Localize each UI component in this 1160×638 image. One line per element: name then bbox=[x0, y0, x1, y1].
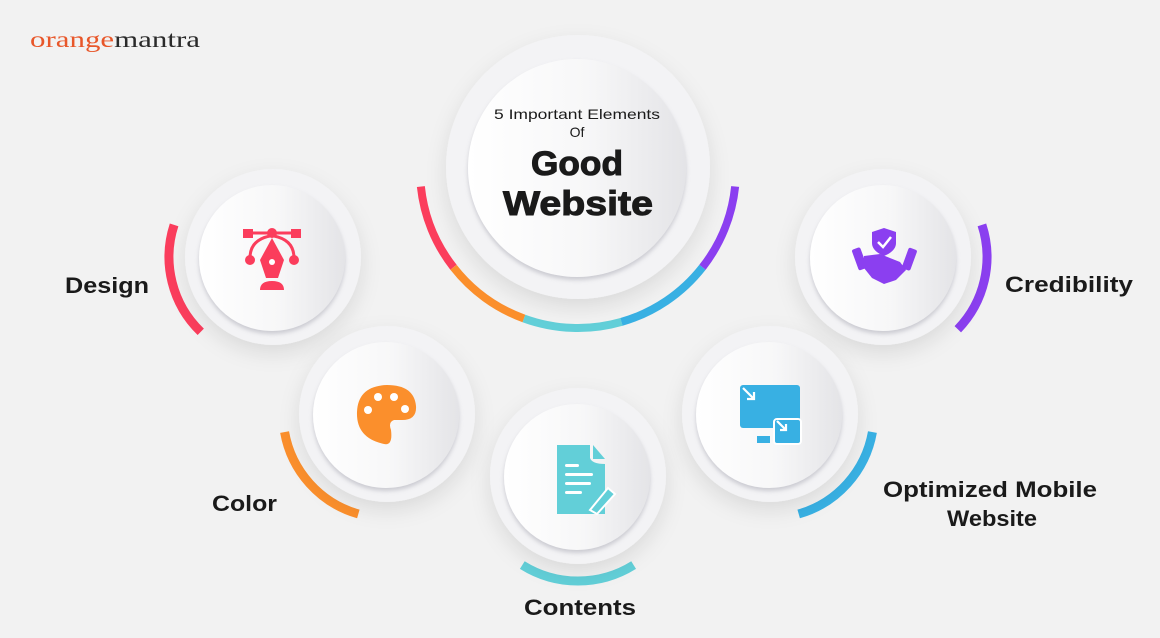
panel: optimized mobile bbox=[650, 294, 890, 534]
label: design: Design bbox=[65, 273, 149, 298]
panel: design bbox=[126, 110, 420, 404]
central arc bbox=[356, 0, 800, 392]
title bbox=[494, 106, 660, 223]
icon: palette bbox=[357, 385, 416, 444]
label: contents: Contents bbox=[524, 595, 636, 620]
label: optimized mobile website bbox=[883, 477, 1097, 531]
central circle bbox=[446, 35, 710, 299]
title: Of bbox=[570, 124, 584, 140]
icon: handshake shield bbox=[851, 228, 917, 284]
title: Website bbox=[503, 185, 653, 223]
title: 5 Important Elements bbox=[494, 106, 660, 122]
panel: contents bbox=[433, 331, 723, 621]
label: optimized mobile website: Website bbox=[947, 506, 1037, 531]
icon: responsive devices bbox=[740, 385, 801, 444]
label: credibility: Credibility bbox=[1005, 272, 1134, 297]
label: color: Color bbox=[212, 491, 277, 516]
label: optimized mobile website: Optimized Mobile bbox=[883, 477, 1097, 502]
panel: color bbox=[258, 285, 516, 543]
icon: pen tool bbox=[243, 228, 301, 290]
logo: orange mantra bbox=[30, 27, 200, 52]
icon: document with pen bbox=[557, 445, 615, 514]
title: Good bbox=[531, 145, 623, 183]
panel: credibility bbox=[752, 126, 1014, 388]
